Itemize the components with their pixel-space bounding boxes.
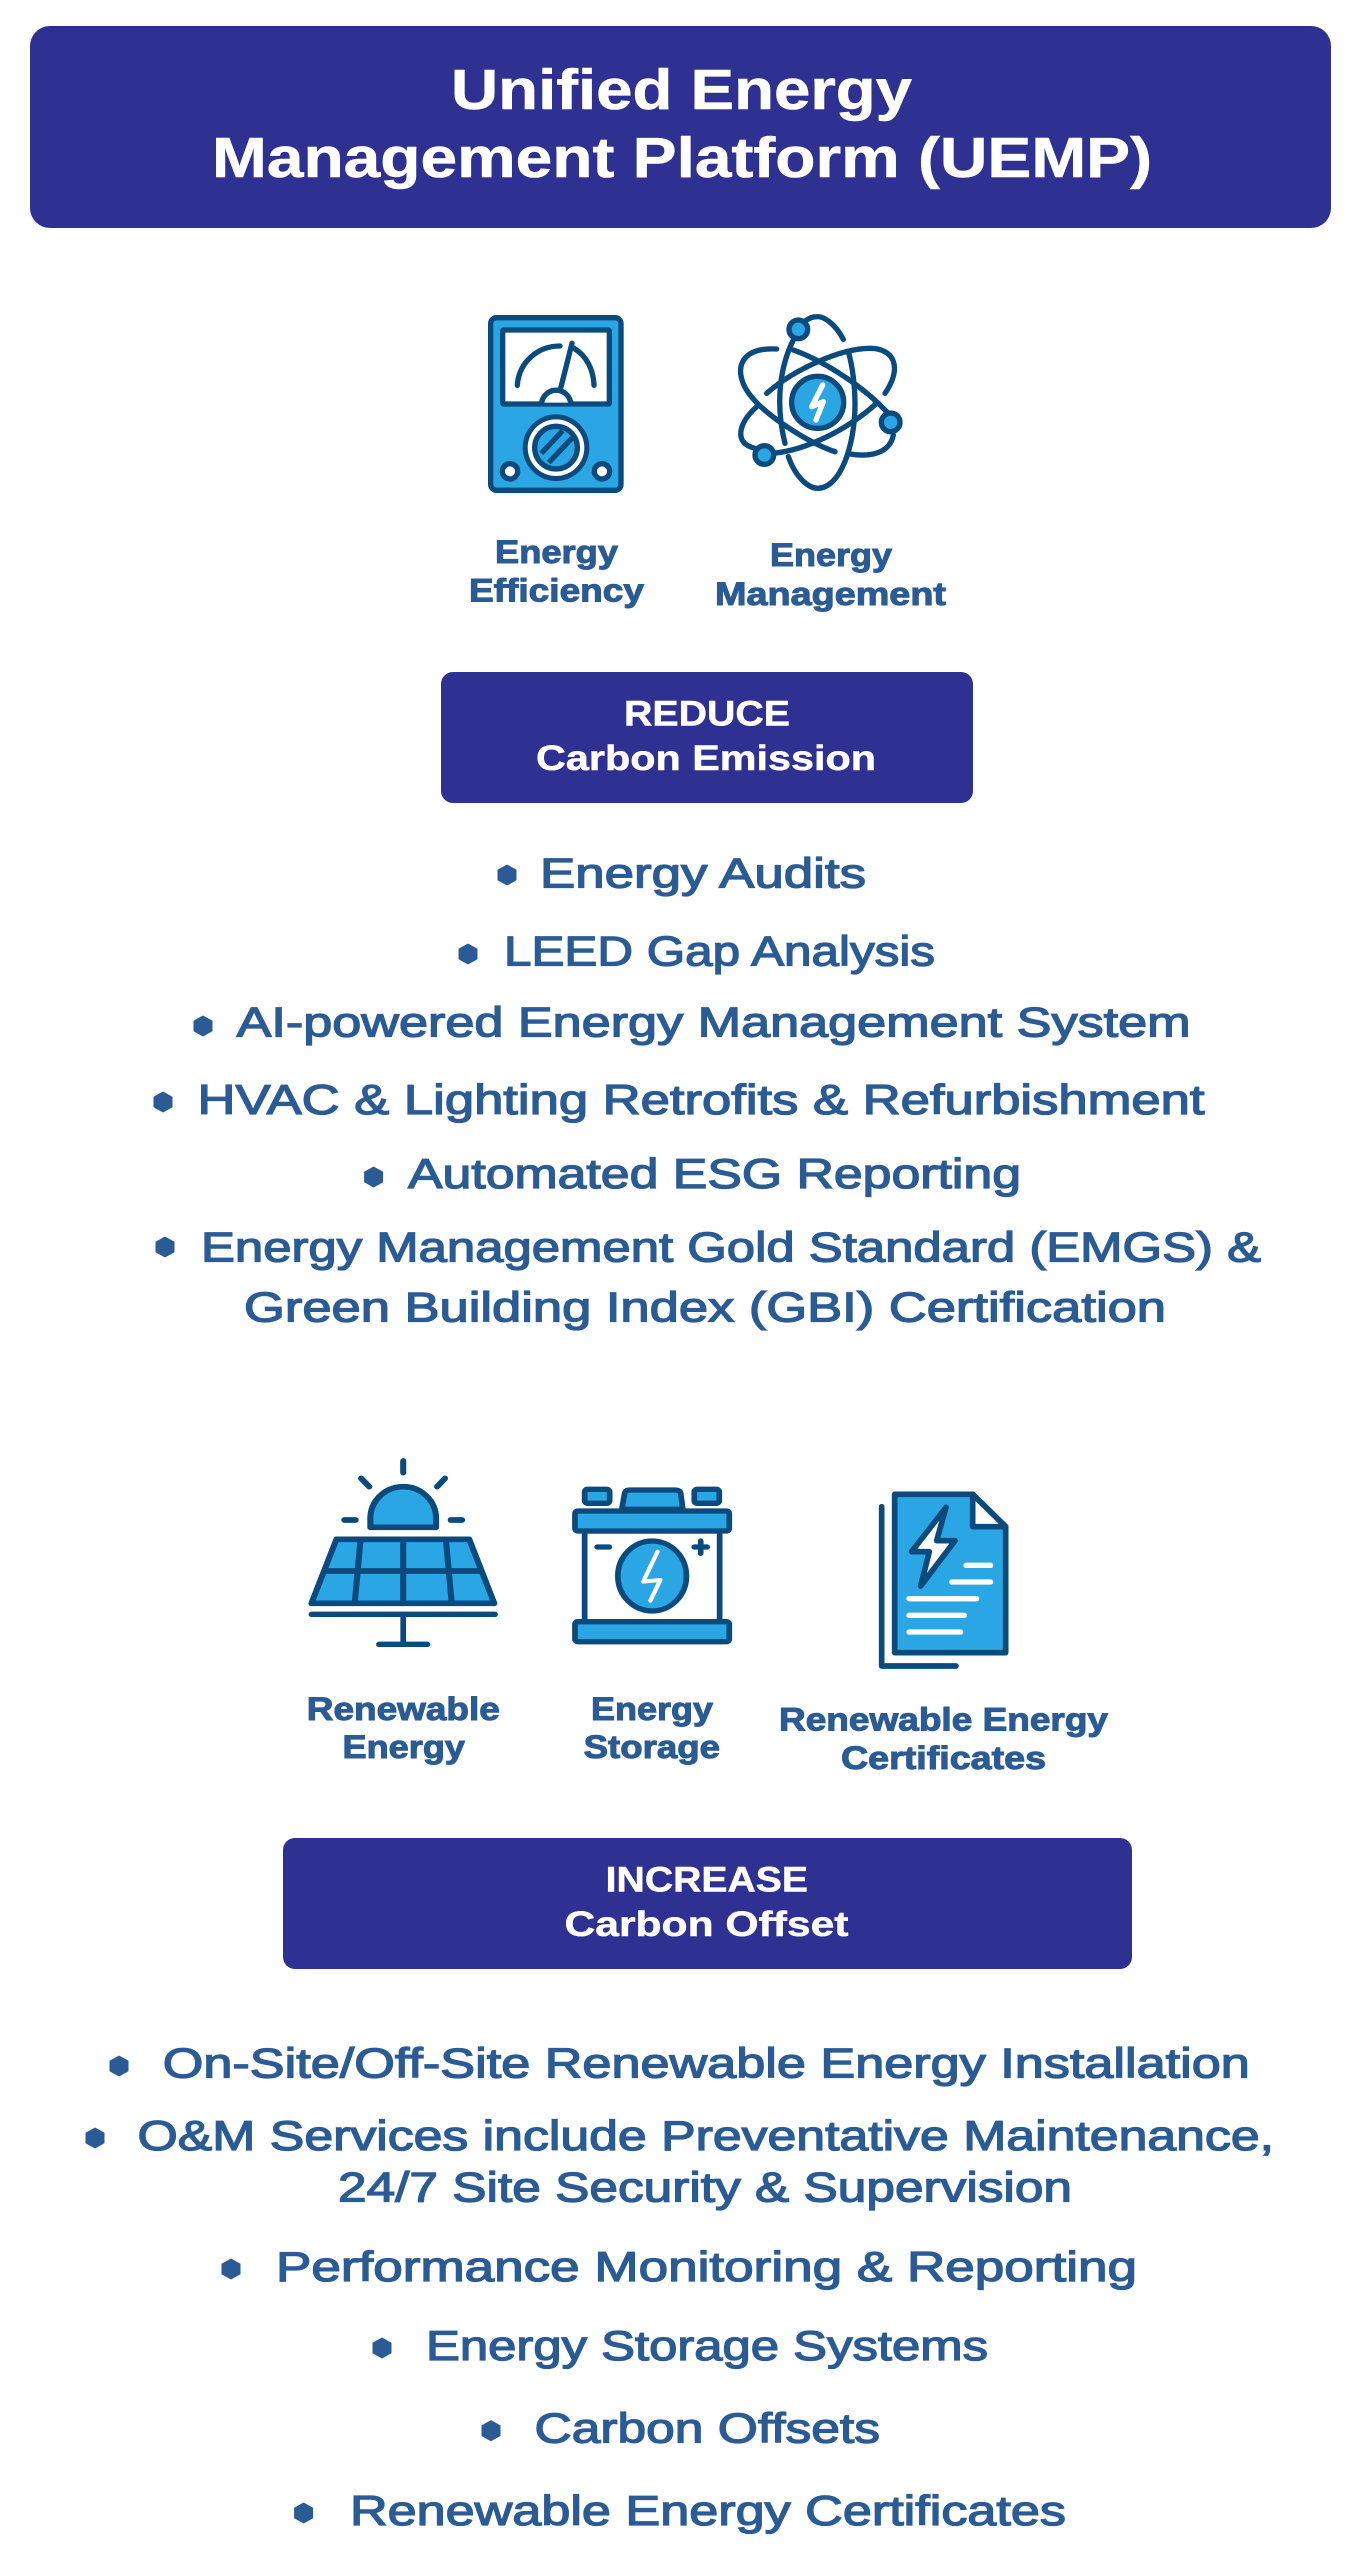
label: Energy Storage: [584, 1691, 720, 1765]
list: increase carbon offset: [86, 2039, 1274, 2534]
title text: [212, 58, 1152, 190]
item: O&M Services: 24/7 Site Security & Supervision: [338, 2164, 1072, 2211]
item: HVAC and Lighting Retrofits: HVAC & Lighting Retrofits & Refurbishment: [198, 1076, 1205, 1123]
item: Renewable Energy Certificates: Renewable Energy Certificates: [350, 2487, 1066, 2534]
item: AI-powered Energy Management System: AI-powered Energy Management System: [237, 999, 1191, 1046]
item: EMGS and GBI Certification: [156, 1224, 1261, 1331]
item: On-Site/Off-Site Renewable Energy Installation: On-Site/Off-Site Renewable Energy Installation: [163, 2039, 1250, 2086]
title text: Unified Energy: [451, 58, 912, 122]
icon: solar panel: [311, 1461, 495, 1644]
icon: battery: [575, 1489, 729, 1642]
item: EMGS and GBI Certification: Green Building Index (GBI) Certification: [244, 1284, 1166, 1331]
item: Energy Storage Systems: Energy Storage Systems: [426, 2322, 988, 2369]
item: Automated ESG Reporting: Automated ESG Reporting: [408, 1150, 1021, 1197]
label: Energy Efficiency: [469, 534, 644, 609]
label: Renewable Energy: [307, 1691, 500, 1765]
item: LEED Gap Analysis: LEED Gap Analysis: [504, 928, 935, 975]
title text: Management Platform (UEMP): [212, 126, 1152, 190]
icon: energy certificate document: [882, 1494, 1006, 1666]
title banner: [30, 26, 1331, 228]
item: O&M Services: O&M Services include Preventative Maintenance,: [138, 2112, 1274, 2159]
item: Performance Monitoring & Reporting: Performance Monitoring & Reporting: [276, 2243, 1137, 2290]
button: REDUCE Carbon Emission: Carbon Emission: [536, 739, 876, 778]
icon: energy meter: [491, 318, 621, 490]
label: Energy Efficiency: Efficiency: [469, 573, 644, 609]
button: REDUCE Carbon Emission: [441, 672, 973, 803]
icon: atom energy management: [741, 317, 900, 488]
list: reduce carbon emission: [154, 850, 1261, 1331]
label: Renewable Energy Certificates: Certificates: [841, 1740, 1046, 1776]
label: Renewable Energy: Renewable: [307, 1691, 500, 1727]
button: INCREASE Carbon Offset: INCREASE: [606, 1861, 808, 1900]
label: Energy Management: [715, 537, 946, 612]
button: INCREASE Carbon Offset: [283, 1838, 1132, 1969]
button: REDUCE Carbon Emission: REDUCE: [624, 695, 790, 734]
label: Energy Management: Management: [715, 576, 946, 612]
label: Energy Storage: Storage: [584, 1729, 720, 1765]
item: O&M Services: [86, 2112, 1274, 2211]
label: Renewable Energy Certificates: [779, 1702, 1108, 1776]
label: Renewable Energy Certificates: Renewable Energy: [779, 1702, 1108, 1738]
item: Carbon Offsets: Carbon Offsets: [534, 2405, 880, 2452]
label: Energy Efficiency: Energy: [495, 534, 618, 570]
label: Energy Management: Energy: [770, 537, 892, 573]
label: Energy Storage: Energy: [591, 1691, 713, 1727]
item: Energy Audits: Energy Audits: [540, 850, 866, 897]
item: EMGS and GBI Certification: Energy Management Gold Standard (EMGS) &: [201, 1224, 1261, 1271]
label: Renewable Energy: Energy: [342, 1729, 465, 1765]
button: INCREASE Carbon Offset: Carbon Offset: [564, 1905, 849, 1944]
